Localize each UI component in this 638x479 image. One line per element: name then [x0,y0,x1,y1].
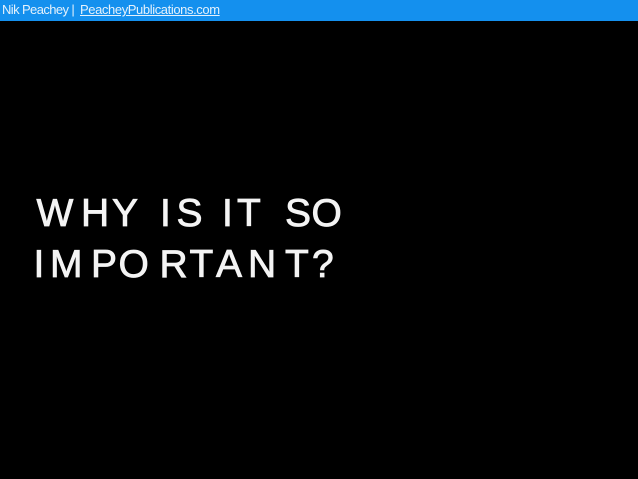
title: why is it so important?: WHYISITSO [36,192,342,235]
byline text: Nik Peachey | [2,2,74,17]
byline text [2,2,220,17]
byline text: PeacheyPublications.com [80,2,220,17]
title: why is it so important? [34,192,342,285]
header bar [0,0,638,21]
title: why is it so important?: IMPORTANT? [34,243,334,285]
